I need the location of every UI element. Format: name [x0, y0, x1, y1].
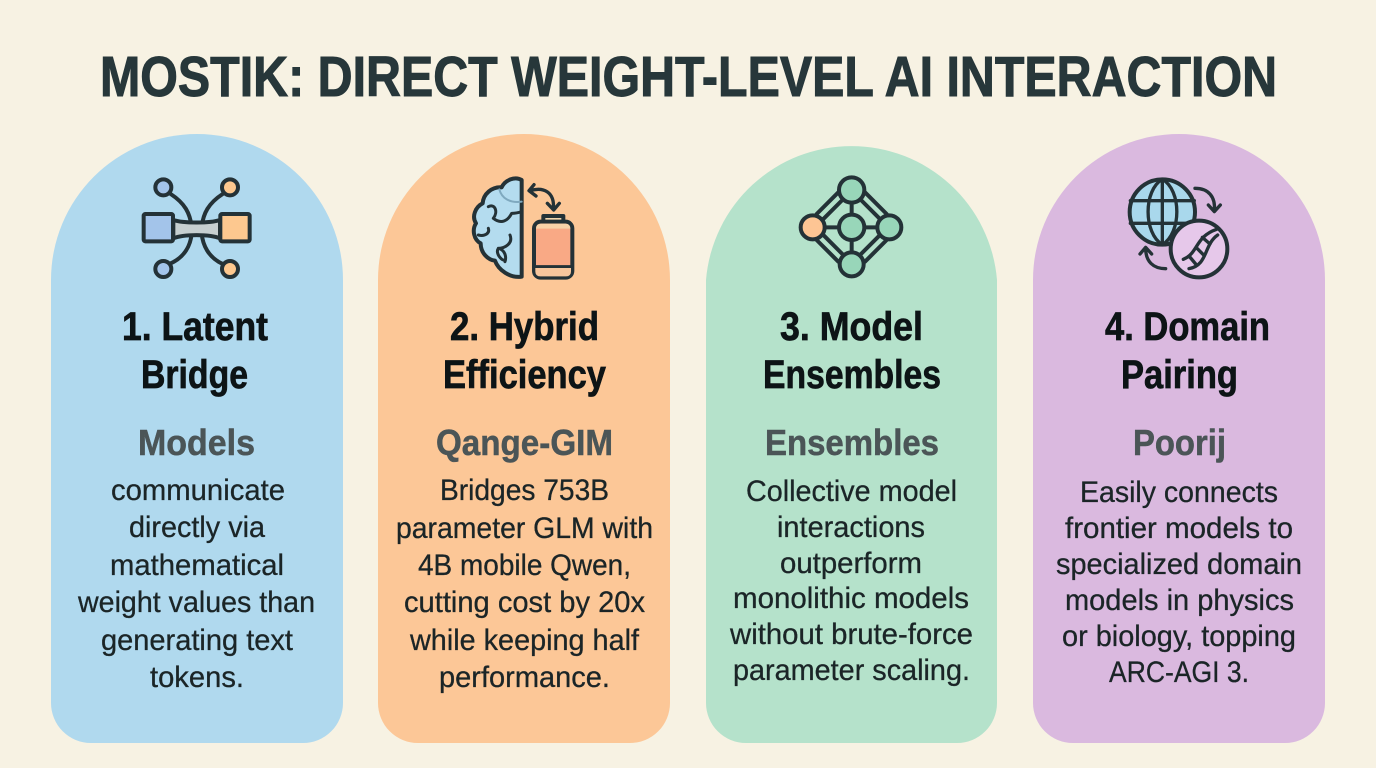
heading: domain pairing — [1105, 305, 1270, 397]
text block: hybrid efficiency description: cutting cost by 20x — [404, 586, 645, 619]
heading: hybrid efficiency: Efficiency — [443, 353, 607, 397]
text block: model ensembles description: parameter scaling. — [733, 654, 970, 687]
text block: domain pairing description: frontier models to — [1065, 512, 1293, 545]
text block: latent bridge description: communicate — [111, 474, 285, 507]
panel: domain pairing — [1033, 134, 1325, 743]
text block: domain pairing description — [1056, 476, 1302, 689]
text block: latent bridge description: tokens. — [150, 661, 244, 694]
subheading: poorij: Poorij — [1133, 422, 1226, 463]
subheading: ensembles: Ensembles — [765, 422, 939, 463]
heading: hybrid efficiency: 2. Hybrid — [450, 305, 599, 349]
subheading: models: Models — [138, 422, 255, 463]
panel: model ensembles — [706, 146, 997, 743]
heading: domain pairing: 4. Domain — [1105, 305, 1270, 349]
text block: hybrid efficiency description — [396, 474, 653, 694]
icon: brain and battery — [474, 178, 572, 278]
text block: model ensembles description: interactions — [777, 511, 925, 544]
text block: domain pairing description: or biology, topping — [1062, 620, 1296, 653]
text block: domain pairing description: specialized domain — [1056, 548, 1302, 581]
heading: model ensembles: 3. Model — [780, 305, 923, 349]
text block: latent bridge description: mathematical — [110, 549, 284, 582]
text block: hybrid efficiency description: parameter GLM with — [396, 512, 653, 545]
panel: hybrid efficiency — [378, 134, 670, 743]
text block: domain pairing description: ARC-AGI 3. — [1109, 656, 1249, 689]
text block: latent bridge description — [77, 474, 315, 694]
text block: model ensembles description: Collective model — [746, 475, 957, 508]
text block: domain pairing description: models in physics — [1065, 584, 1294, 617]
icon: globe and dna — [1130, 179, 1227, 277]
text block: model ensembles description: outperform — [780, 547, 922, 580]
text block: hybrid efficiency description: while keeping half — [409, 624, 640, 657]
text block: model ensembles description: without brute-force — [729, 618, 973, 651]
icon: ensemble network — [801, 177, 901, 276]
text block: model ensembles description: monolithic models — [733, 582, 969, 615]
heading: model ensembles — [763, 305, 941, 397]
text block: domain pairing description: Easily connects — [1080, 476, 1278, 509]
text block: hybrid efficiency description: 4B mobile Qwen, — [418, 549, 631, 582]
heading: latent bridge: 1. Latent — [122, 305, 268, 349]
icon: latent bridge network — [144, 179, 250, 277]
heading: hybrid efficiency — [443, 305, 607, 397]
subheading: qange-gim: Qange-GIM — [436, 422, 613, 463]
text block: latent bridge description: generating text — [101, 624, 294, 657]
heading: latent bridge: Bridge — [141, 353, 248, 397]
text block: latent bridge description: directly via — [129, 511, 265, 544]
heading: latent bridge — [122, 305, 268, 397]
text block: model ensembles description — [729, 475, 973, 687]
panel: latent bridge — [51, 134, 343, 743]
text block: latent bridge description: weight values than — [77, 586, 315, 619]
heading: domain pairing: Pairing — [1121, 353, 1238, 397]
text block: hybrid efficiency description: Bridges 753B — [440, 474, 609, 507]
text block: hybrid efficiency description: performance. — [439, 661, 610, 694]
heading: model ensembles: Ensembles — [763, 353, 941, 397]
